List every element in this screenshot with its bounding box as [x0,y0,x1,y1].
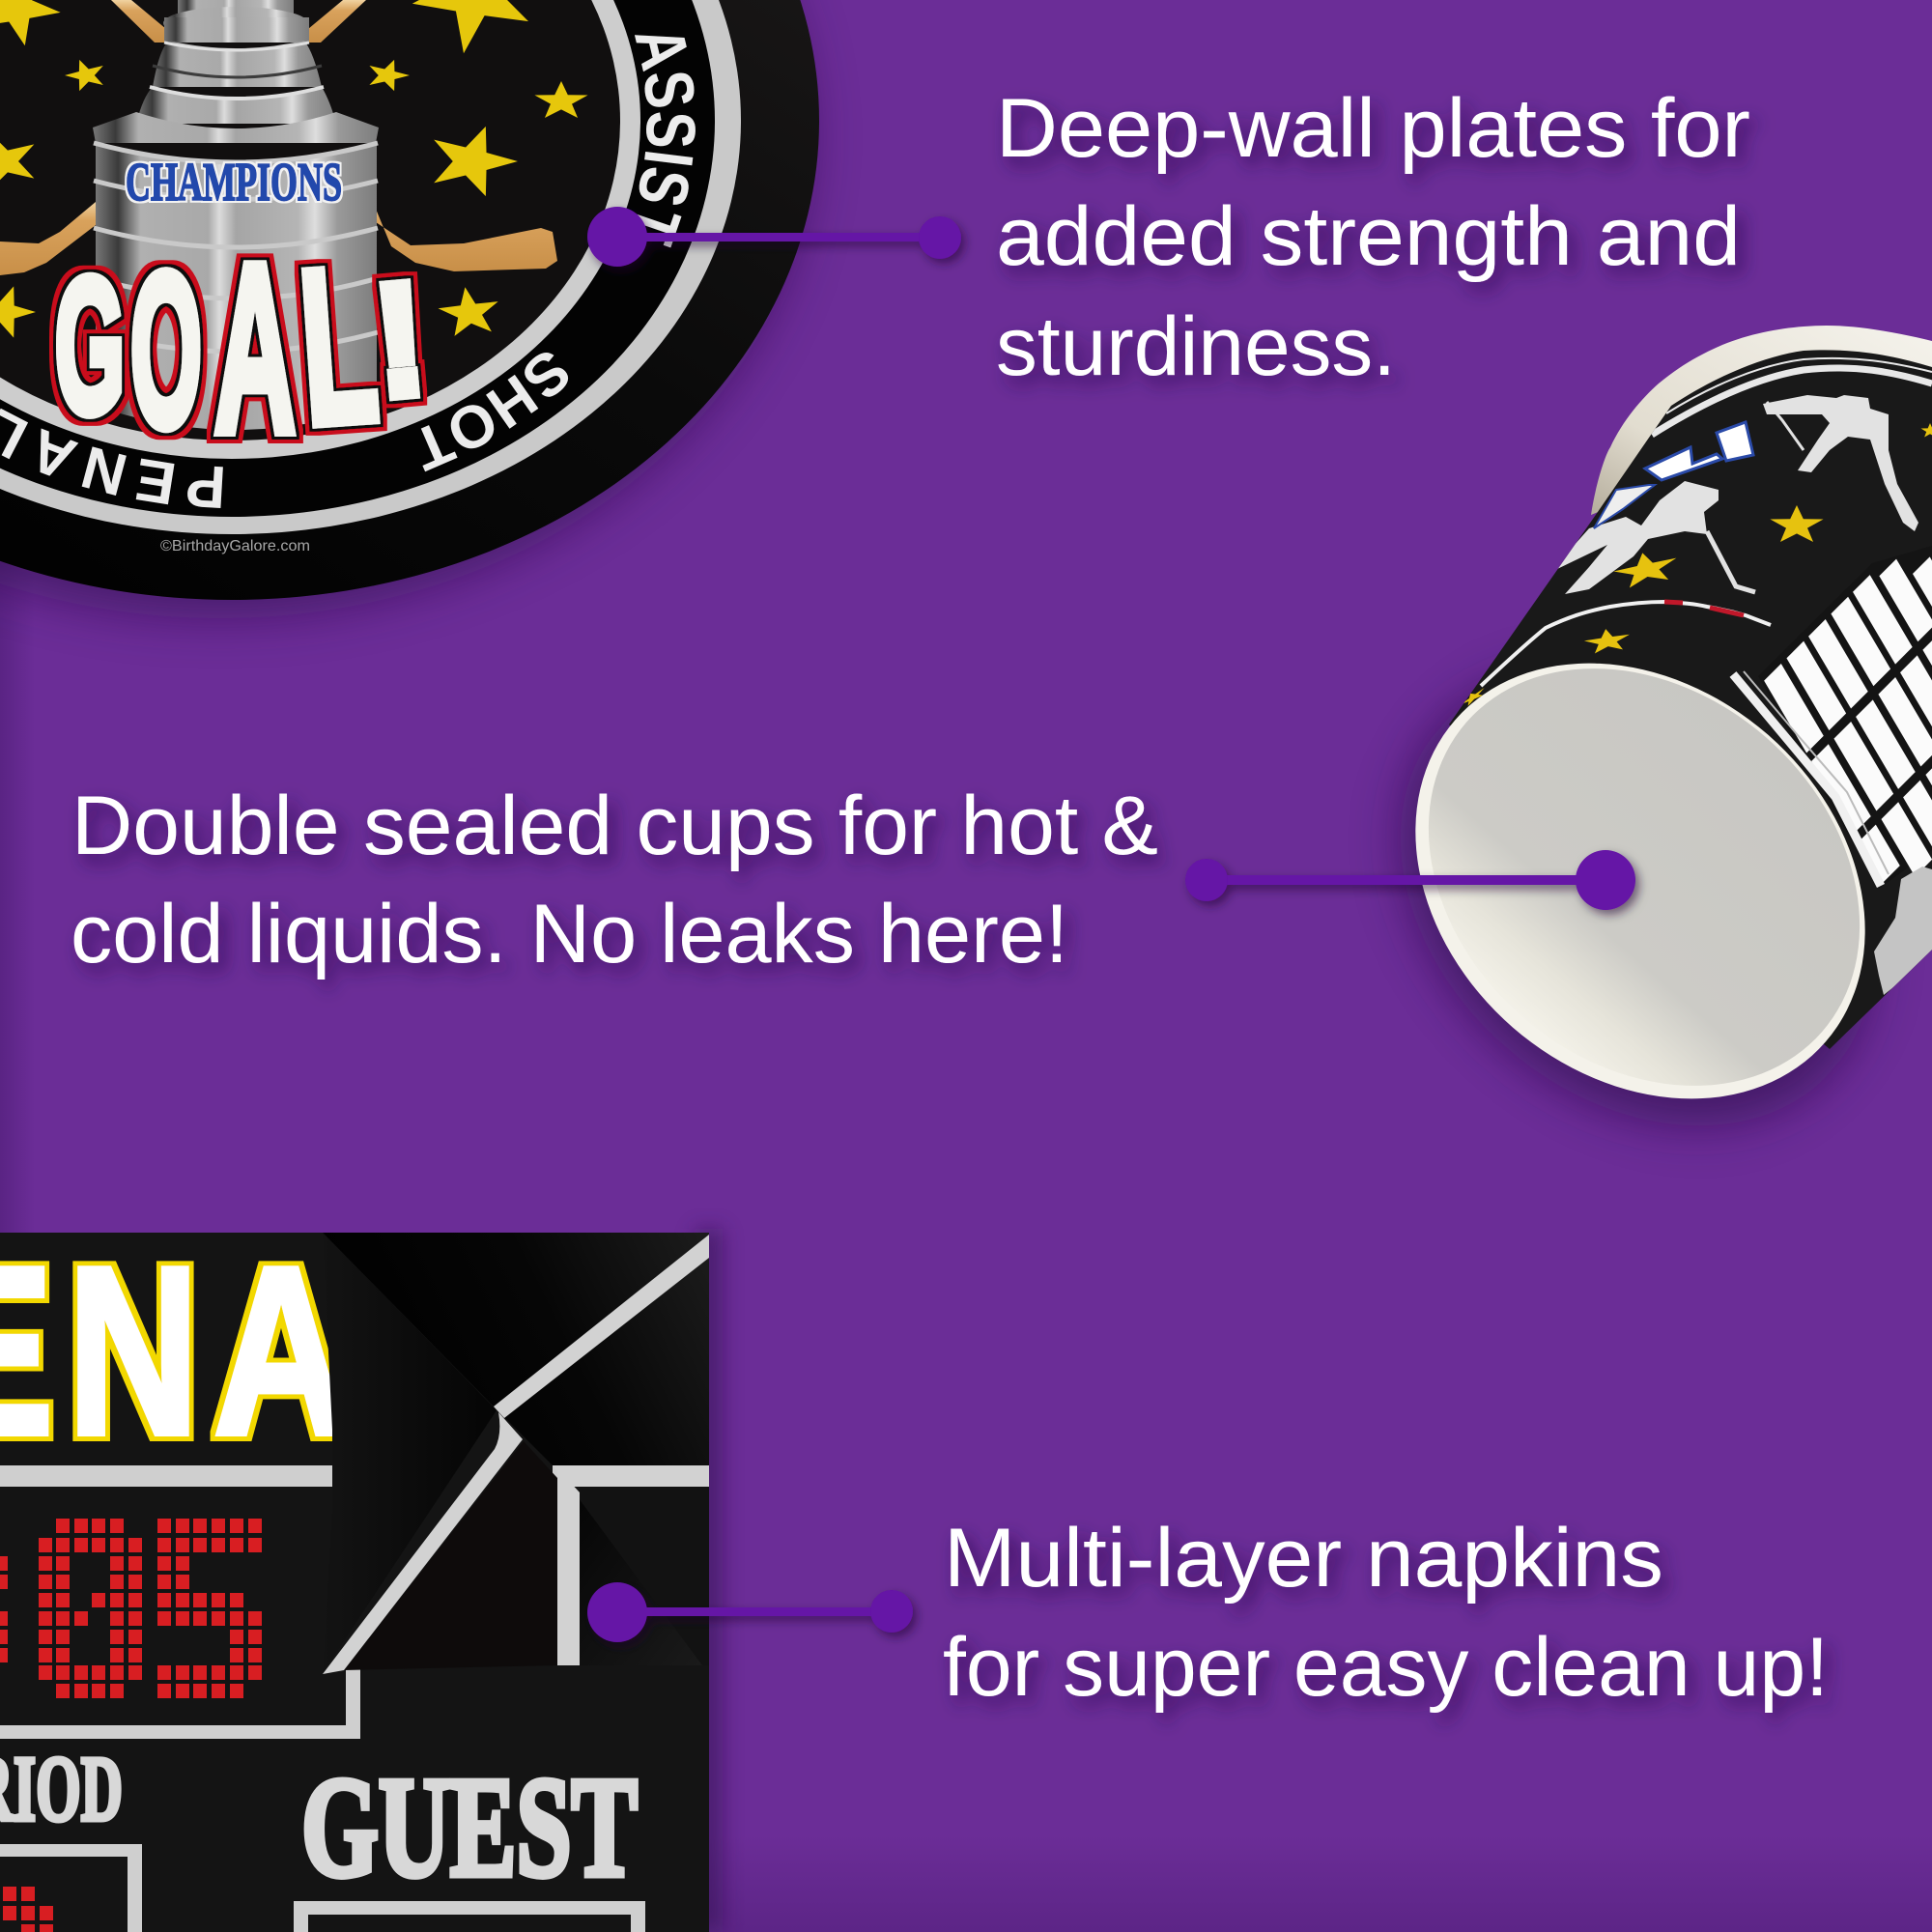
callout: plates text: Deep-wall plates for [996,82,1750,175]
cup body [1449,350,1932,1049]
napkin title letters [0,1216,349,1485]
cup base [1327,574,1932,1188]
goal wordmark: O [130,227,202,471]
callout: plates text: sturdiness. [996,300,1396,393]
napkin fold [323,1233,709,1674]
napkin title letters: N [68,1216,199,1485]
red line [1481,602,1771,686]
lettering [1594,422,1753,528]
napkin title letters: A [213,1216,349,1485]
rim words: ASSIST [635,35,696,247]
cup stars [1459,423,1932,851]
outer silver ring [0,0,741,534]
connector: napkin [587,1582,913,1642]
trophy [93,0,379,430]
rim words: SHOT [421,353,568,471]
player: edge [1874,867,1932,995]
rim lines [1652,358,1932,435]
callout: napkins text [943,1512,1829,1714]
trophy label: CHAMPIONS [126,153,342,213]
printed trophy [1729,556,1932,888]
label: guest: GUEST [301,1748,638,1907]
copyright: ©BirthdayGalore.com [160,538,310,554]
callout: cups text: cold liquids. No leaks here! [71,888,1068,980]
player: lower [1555,481,1755,594]
cup far rim [1591,326,1932,515]
callout: cups text: Double sealed cups for hot & [71,780,1158,872]
stars [0,0,588,341]
plate rim [0,0,819,600]
callout: napkins text: Multi-layer napkins [944,1512,1663,1605]
callout: napkins text: for super easy clean up! [943,1621,1829,1714]
scoreboard lines [0,1465,709,1932]
panel: napkin [0,1216,723,1932]
goal wordmark: ! [368,249,432,430]
connector: cup [1185,850,1635,910]
hockey sticks [0,0,557,275]
connector: plate [587,207,961,267]
callout: cups text [71,780,1158,980]
goal wordmark [55,213,432,482]
panel: cup [1381,326,1932,1146]
callout: plates text: added strength and [996,190,1741,283]
goal wordmark: L [294,220,384,469]
callout: plates text [996,82,1750,393]
goal wordmark: A [214,213,296,482]
inner silver ring [0,0,640,459]
goal wordmark: G [55,239,125,452]
rim words [0,35,696,508]
player: upper [1763,395,1918,531]
printed trophy base rail [1733,674,1881,886]
led score digits [0,1519,262,1932]
silver fold stripes [323,1235,709,1674]
panel: plate [0,0,831,638]
